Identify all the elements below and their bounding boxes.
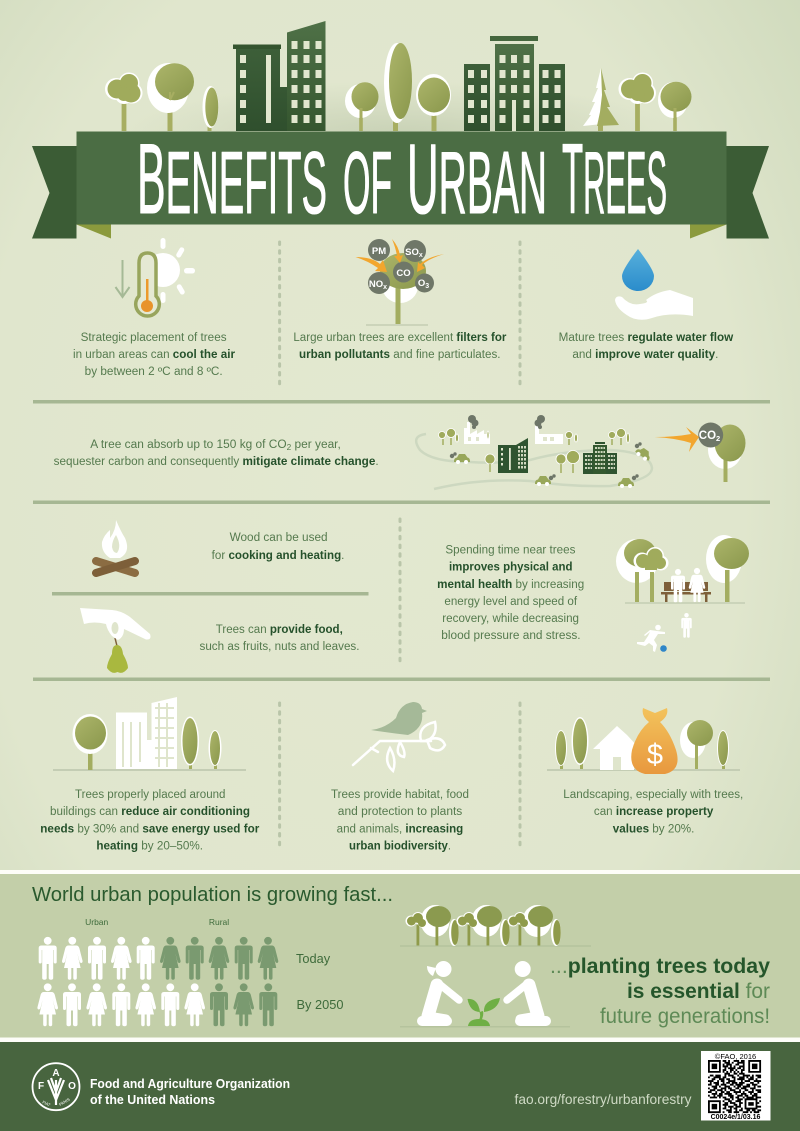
text: water: Mature trees regulate water flow: [559, 332, 733, 344]
panel: water: [559, 249, 733, 361]
slogan: ...planting trees today: [550, 954, 770, 978]
panel: carbon: [54, 415, 746, 489]
organisation name: Food and Agriculture Organization: [90, 1077, 290, 1091]
label: rural: Rural: [209, 917, 229, 927]
text: property: [563, 789, 743, 835]
text: biodiversity: urban biodiversity.: [349, 840, 451, 852]
text: biodiversity: and animals, increasing: [337, 823, 463, 835]
icon: CO2 tree: [654, 422, 746, 482]
icon: seedling: [468, 998, 500, 1026]
logo: FAO: F: [38, 1081, 44, 1092]
left tail: [32, 146, 76, 238]
folds: [76, 224, 111, 238]
text: health: [437, 544, 584, 642]
icon: tree with pollutants: [356, 239, 444, 325]
pictogram row: 2050: [37, 983, 277, 1026]
tree 5: [384, 43, 412, 131]
logo: FAO: FIAT: [42, 1099, 52, 1108]
tree 4: [345, 82, 378, 131]
icon: tree with pollutants: CO: [396, 268, 411, 279]
text: carbon: A tree can absorb up to 150 kg of CO: [90, 439, 280, 451]
tree 6: [416, 74, 451, 131]
organisation name: of the United Nations: [90, 1093, 215, 1107]
panel: energy: [40, 697, 260, 852]
title: OF: [343, 133, 392, 232]
park illustration: [616, 535, 749, 652]
text: energy: buildings can reduce air conditioning: [50, 806, 250, 818]
pine tree: [583, 68, 619, 131]
bench: [661, 582, 711, 602]
icon: bird: [371, 702, 427, 735]
text: health: improves physical and: [449, 562, 572, 574]
panel: water: and improve water quality.: [572, 349, 718, 361]
text: filters: Large urban trees are excellent filters for: [293, 332, 507, 344]
factories: [464, 422, 490, 444]
text: energy: heating by 20–50%.: [96, 840, 203, 852]
slogan: is essential for: [627, 979, 770, 1003]
logo: FAO: [32, 1063, 80, 1110]
buildings: [498, 438, 528, 473]
text: property: can increase property: [594, 806, 714, 818]
panel: filters pollutants: urban pollutants and fine particulates.: [299, 349, 500, 361]
text: carbon: 2: [287, 443, 292, 452]
panel: carbon: sequester carbon and consequently mitigate climate change.: [54, 456, 379, 468]
text: energy: needs by 30% and save energy used for: [40, 823, 260, 835]
text: health: energy level and speed of: [444, 596, 578, 608]
small trees: [438, 428, 630, 464]
pictogram row: today: [39, 937, 278, 980]
slogan: [550, 954, 770, 1028]
website: fao.org/forestry/urbanforestry: [514, 1092, 692, 1107]
icon: tree with pollutants: NO: [369, 279, 383, 290]
QR code: ©FAO, 2016: [715, 1052, 756, 1061]
text: wood: Wood can be used: [230, 532, 328, 544]
panel: property: [547, 708, 743, 835]
tree 1: [105, 72, 142, 131]
white band: [0, 870, 800, 874]
panel: cool the air: in urban areas can cool the air: [73, 349, 236, 361]
QR code: C0024e/1/03.16: [711, 1114, 761, 1121]
city illustration: [416, 415, 653, 489]
tree 7: [618, 72, 656, 131]
organisation name: [90, 1077, 290, 1107]
label: by 2050: By 2050: [296, 997, 343, 1012]
tree 8: [658, 82, 692, 131]
text: health: mental health by increasing: [437, 579, 584, 591]
runner: [637, 625, 665, 652]
text: property: Landscaping, especially with trees,: [563, 789, 743, 801]
panel: population band: [0, 874, 800, 1038]
panel: wood: for cooking and heating.: [212, 550, 344, 562]
icon: water drop: [622, 249, 654, 291]
icon: tree with pollutants: x: [383, 284, 387, 291]
separators: [33, 400, 770, 681]
text: health: recovery, while decreasing: [442, 613, 579, 625]
building right: [464, 36, 565, 131]
text: biodiversity: Trees provide habitat, food: [331, 789, 469, 801]
icon: tree with pollutants: O: [418, 278, 425, 289]
illustration: row of trees: [400, 905, 591, 946]
logo: FAO: A: [52, 1068, 60, 1079]
divider dots bottom: [280, 703, 520, 846]
slogan: future generations!: [600, 1004, 770, 1028]
money bag: [631, 708, 678, 774]
text: energy: Trees properly placed around: [75, 789, 226, 801]
icon: CO2 tree: CO: [699, 430, 716, 442]
logo: FAO: O: [68, 1081, 76, 1092]
icon: tree with pollutants: x: [419, 252, 423, 259]
background: [0, 0, 800, 872]
divider dots: [280, 242, 520, 386]
icon: sun and thermometer: [116, 238, 195, 316]
panel: filters pollutants: [293, 239, 507, 361]
illustration: people planting: [400, 961, 570, 1027]
panel: cool the air: [73, 238, 236, 378]
ribbon banner with title: [32, 123, 769, 238]
panel: food: such as fruits, nuts and leaves.: [200, 641, 360, 653]
icon: hand and pear: [80, 608, 150, 673]
heading: population: World urban population is growing fast...: [32, 884, 393, 906]
text: health: blood pressure and stress.: [441, 630, 581, 642]
icon: tree with pollutants: 3: [425, 283, 429, 290]
divider middle: [398, 519, 402, 663]
skyline illustration: [105, 21, 692, 131]
title: BENEFITS: [137, 123, 327, 234]
icon: campfire: [96, 520, 135, 573]
white band lower: [0, 1038, 800, 1042]
panel: food: [80, 608, 360, 673]
text: cool the air: Strategic placement of trees: [81, 332, 227, 344]
right tail: [726, 146, 769, 238]
text: property: values by 20%.: [613, 823, 694, 835]
footer: [0, 1042, 800, 1131]
cars: [454, 454, 470, 464]
text: health: Spending time near trees: [445, 544, 576, 556]
illustration: house, trees and money bag: $: [647, 739, 663, 771]
icon: tree with pollutants: PM: [372, 246, 386, 257]
building left: [233, 21, 326, 131]
ball: [660, 645, 667, 652]
label: today: Today: [296, 951, 331, 966]
standing person: [681, 613, 692, 638]
panel: health: [437, 535, 749, 652]
illustration: buildings and trees: [53, 697, 246, 770]
logo: FAO: PANIS: [58, 1097, 71, 1107]
text: biodiversity: [331, 789, 469, 852]
text: food: Trees can provide food,: [216, 624, 343, 636]
icon: tree with pollutants: SO: [405, 247, 419, 258]
text: energy: [40, 789, 260, 852]
icon: CO2 tree: 2: [716, 434, 720, 443]
icon: hand: [615, 290, 693, 320]
QR code: [701, 1051, 770, 1121]
illustration: house, trees and money bag: [547, 708, 740, 774]
text: biodiversity: and protection to plants: [338, 806, 463, 818]
tree 3: [202, 86, 218, 131]
people on bench: [671, 568, 705, 602]
text: carbon: per year,: [291, 439, 341, 451]
tree 2: [147, 63, 194, 131]
panel: wood: [96, 520, 344, 573]
label: urban: Urban: [85, 917, 109, 927]
icon: branch: [353, 722, 445, 771]
panel: cool the air: by between 2 ºC and 8 ºC.: [85, 366, 223, 378]
title: URBAN: [407, 123, 547, 234]
panel: biodiversity: [331, 702, 469, 852]
